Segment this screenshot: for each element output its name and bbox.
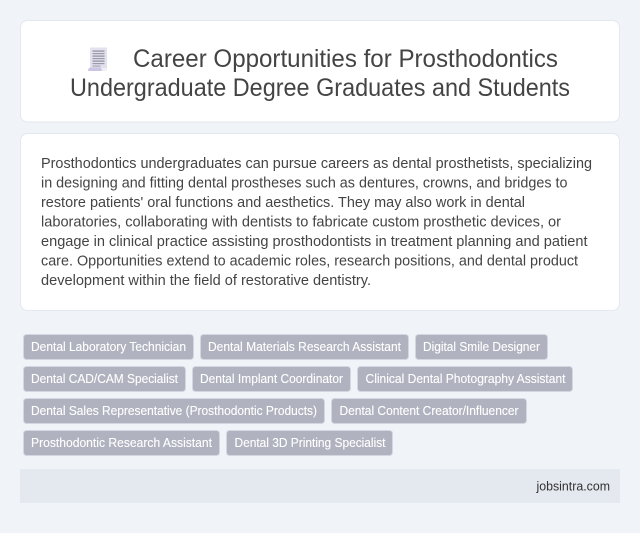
tag <box>24 398 324 424</box>
text block: description: laboratories, collaborating with dentists to fabricate custom prosthetic devices, or <box>41 214 561 230</box>
tag: Dental Implant Coordinator <box>200 371 344 386</box>
tag <box>416 334 548 360</box>
heading: Career Opportunities for Prosthodontics <box>133 46 558 73</box>
tag <box>226 430 392 456</box>
text block: description: care. Opportunities extend to academic roles, research positions, and dental product <box>41 254 578 270</box>
tag <box>358 366 572 392</box>
text block: description <box>41 156 592 289</box>
tag: Dental 3D Printing Specialist <box>234 435 386 450</box>
text block: description: engage in clinical practice assisting prosthodontists in treatment planning and patient <box>41 234 588 250</box>
tag: Dental Laboratory Technician <box>31 339 186 354</box>
footer bar <box>20 469 620 503</box>
panel: title card <box>20 20 620 122</box>
heading: Undergraduate Degree Graduates and Students <box>70 75 570 102</box>
tag: Dental Materials Research Assistant <box>208 339 401 354</box>
panel: description card <box>20 134 620 310</box>
text block: description: Prosthodontics undergraduates can pursue careers as dental prosthetists, specializing <box>41 156 592 172</box>
footer source text: jobsintra.com <box>536 478 610 494</box>
text block: description: in designing and fitting dental prostheses such as dentures, crowns, and bridges to <box>41 176 568 192</box>
tag <box>24 366 186 392</box>
tag: Dental CAD/CAM Specialist <box>31 371 178 386</box>
text block: description: development within the field of restorative dentistry. <box>41 273 371 289</box>
tag <box>200 334 408 360</box>
tag: Digital Smile Designer <box>423 339 541 354</box>
tag: Dental Sales Representative (Prosthodontic Products) <box>31 403 317 418</box>
tag <box>332 398 526 424</box>
tag: Dental Content Creator/Influencer <box>340 403 519 418</box>
tag: Prosthodontic Research Assistant <box>31 435 212 450</box>
heading <box>70 46 570 102</box>
text block: description: restore patients' oral functions and aesthetics. They may also work in dental <box>41 195 525 211</box>
tag <box>24 430 220 456</box>
tag <box>24 334 194 360</box>
icon: document scroll <box>88 48 107 71</box>
tag list: career roles <box>24 334 572 456</box>
tag: Clinical Dental Photography Assistant <box>366 371 566 386</box>
tag <box>192 366 350 392</box>
